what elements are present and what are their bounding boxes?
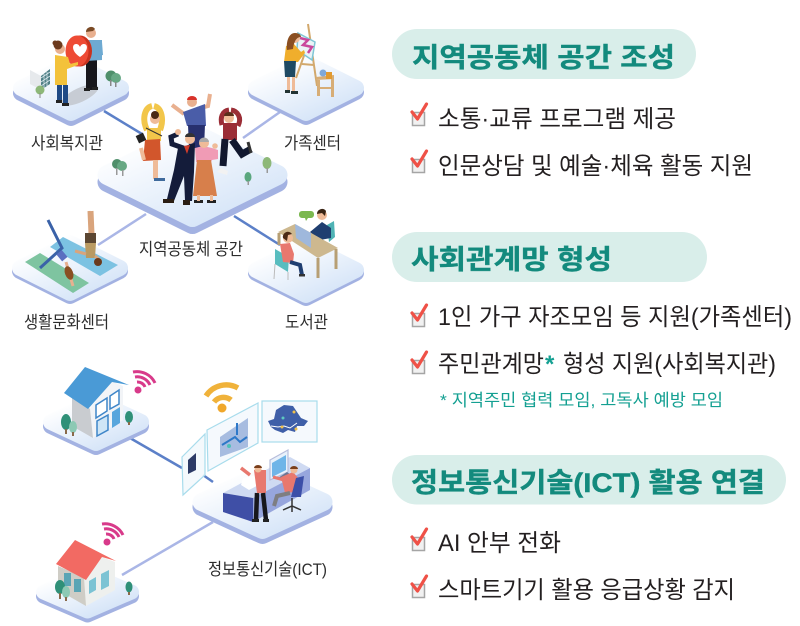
label: community space: 지역공동체 공간: [139, 240, 243, 259]
icon: orange wifi signal: [206, 385, 238, 412]
platform: library: [256, 245, 356, 298]
heading: social network formation: [392, 232, 707, 282]
heading: community space creation: [392, 29, 696, 79]
icon: red-roof house: [55, 540, 132, 606]
platform: blue house: [51, 401, 141, 447]
label: family center: 가족센터: [284, 134, 341, 153]
panel: community network diagram: [20, 24, 356, 332]
figure: man in red: [217, 110, 251, 175]
list item: resident network: [412, 351, 776, 378]
label: ICT center: 정보통신기술(ICT): [208, 560, 327, 579]
platform: lifestyle culture center: [20, 243, 120, 296]
icon: group of cheering people: [136, 94, 251, 205]
footnote: * 지역주민 협력 모임, 고독사 예방 모임: [440, 391, 723, 410]
icon: floating screens: [182, 401, 317, 495]
icon: blue-roof house: [61, 367, 133, 438]
panel: ICT network diagram: [44, 367, 327, 615]
connector lines: [122, 438, 213, 575]
icon: operators at desk: [223, 450, 310, 522]
heading: social network formation: 사회관계망 형성: [411, 245, 612, 275]
figure: elderly woman: [193, 138, 218, 203]
icon: pink wifi signal (blue house): [133, 372, 155, 394]
connector lines: [98, 111, 280, 245]
icon: people meeting at table: [274, 209, 338, 280]
label: social welfare center: 사회복지관: [31, 134, 103, 153]
platform: family center: [256, 63, 356, 117]
platform: red house: [44, 573, 132, 615]
list item: smart devices: 스마트기기 활용 응급상황 감지: [438, 577, 735, 604]
list item: programs: 소통·교류 프로그램 제공: [438, 106, 676, 133]
figure: woman in yellow: [136, 106, 165, 181]
figure: man in blue: [172, 94, 210, 148]
list item: AI calls: AI 안부 전화: [438, 530, 561, 557]
heading: community space creation: 지역공동체 공간 조성: [412, 43, 675, 73]
icon: pink wifi signal (red house): [102, 524, 123, 546]
list item: resident network: *: [545, 351, 555, 378]
figure: man in suit: [163, 129, 195, 205]
list item: resident network: 형성 지원(사회복지관): [563, 351, 776, 378]
heading: ICT connection: [392, 455, 786, 504]
list item: counselling: 인문상담 및 예술·체육 활동 지원: [438, 153, 753, 180]
label: library: 도서관: [285, 313, 328, 332]
panel: ICT section: [392, 455, 786, 604]
list item: resident network: 주민관계망: [438, 351, 544, 378]
platform: social welfare center: [21, 63, 121, 118]
icon: painter at easel: [284, 24, 334, 97]
panel: community space section: [392, 29, 753, 180]
list item: single households: 1인 가구 자조모임 등 지원(가족센터): [438, 304, 792, 331]
platform: ICT center: [202, 474, 324, 535]
icon: people doing yoga: [25, 211, 118, 293]
heading: ICT connection: 정보통신기술(ICT) 활용 연결: [411, 468, 765, 498]
label: lifestyle culture center: 생활문화센터: [24, 313, 109, 332]
platform: community space: [108, 133, 278, 224]
icon: people holding heart: [52, 27, 103, 106]
panel: social network section: [392, 232, 792, 410]
